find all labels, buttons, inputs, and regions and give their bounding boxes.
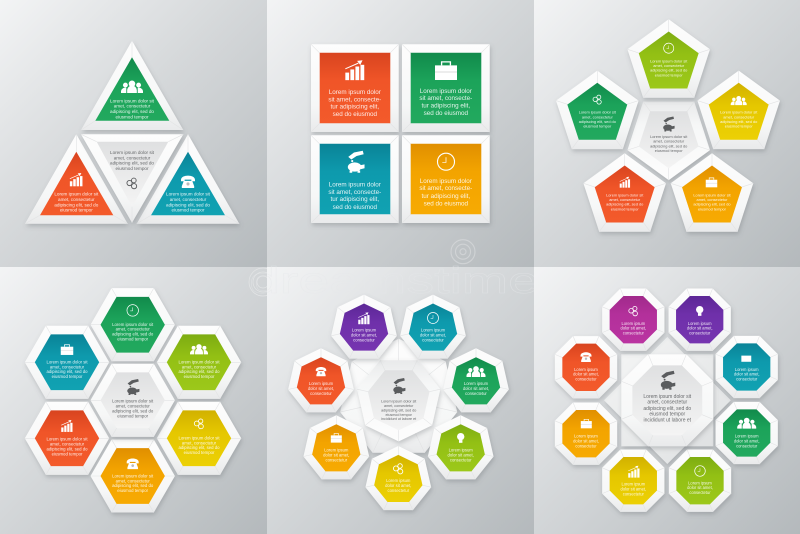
hexagon: red: adipiscing elit, sed do xyxy=(46,446,88,452)
pentagon: lime: amet, consectetur xyxy=(653,63,685,68)
hexagon: lime xyxy=(157,326,241,399)
panel: hexagon diagram xyxy=(0,267,277,534)
panel: octagon diagram xyxy=(534,267,800,534)
octagon: magenta: dolor sit amet, xyxy=(620,326,646,331)
octagon: lime: consectetur xyxy=(689,490,711,495)
octagon: teal xyxy=(716,336,778,398)
octagon: green: Lorem ipsum xyxy=(735,434,759,439)
hexagon: red: eiusmod tempor xyxy=(52,451,83,456)
watermark spiral xyxy=(249,268,277,296)
center triangle: neutral: adipiscing elit, sed do xyxy=(110,161,154,166)
octagon: center neutral: incididunt ut labore et xyxy=(644,417,692,423)
heptagon: center neutral: Lorem ipsum dolor sit xyxy=(381,400,416,404)
octagon: yellow: consectetur xyxy=(623,491,645,496)
octagon: center neutral: Lorem ipsum dolor sit xyxy=(643,394,692,400)
heptagon: lime: dolor sit amet, xyxy=(448,453,474,458)
heptagon: center neutral xyxy=(357,360,440,441)
octagon: center neutral: eiusmod tempor xyxy=(649,412,686,418)
octagon: teal: Lorem ipsum xyxy=(735,367,759,372)
hexagon: yellow: amet, consectetur xyxy=(182,440,217,445)
heptagon: green: consectetur xyxy=(465,391,487,396)
octagon: teal: dolor sit amet, xyxy=(734,372,760,377)
hexagon: lime: eiusmod tempor xyxy=(184,374,215,379)
octagon: green xyxy=(716,402,778,464)
hexagon: teal: eiusmod tempor xyxy=(52,374,83,379)
hexagon: green: adipiscing elit, sed do xyxy=(112,332,154,337)
center triangle: neutral: eiusmod tempor xyxy=(116,166,149,171)
hexagon: orange xyxy=(90,439,175,513)
hexagon: yellow: eiusmod tempor xyxy=(184,450,215,455)
octagon: orange: Lorem ipsum xyxy=(574,434,598,439)
octagon: lime xyxy=(669,450,731,512)
heptagon: lime: Lorem ipsum xyxy=(449,448,473,453)
pentagon: orange: adipiscing elit, sed do xyxy=(693,202,731,207)
pentagon: green: adipiscing elit, sed do xyxy=(579,119,616,124)
hexagon: center neutral: amet, consectetur xyxy=(116,403,150,408)
watermark spiral xyxy=(451,240,475,264)
octagon: yellow: dolor sit amet, xyxy=(620,487,646,492)
heptagon: purple: Lorem ipsum xyxy=(352,328,377,333)
square: orange xyxy=(402,135,490,223)
panel: pentagon diagram xyxy=(534,0,800,267)
pentagon: lime xyxy=(627,19,710,98)
octagon: orange: consectetur xyxy=(575,443,597,448)
square: teal: sed do eiusmod xyxy=(333,204,378,211)
heptagon: green: dolor sit amet, xyxy=(463,386,489,391)
hexagon: teal xyxy=(25,326,109,399)
pentagon: lime: Lorem ipsum dolor sit xyxy=(650,58,688,63)
hexagon: teal: amet, consectetur xyxy=(50,364,85,369)
watermark: dreamstime xyxy=(249,260,539,301)
right triangle: teal: amet, consectetur xyxy=(170,197,207,202)
pentagon: yellow: amet, consectetur xyxy=(723,114,755,119)
octagon: green: dolor sit amet, xyxy=(734,439,760,444)
pentagon: green: amet, consectetur xyxy=(582,114,613,119)
heptagon: orange: consectetur xyxy=(325,458,348,463)
octagon: yellow xyxy=(602,450,664,512)
pentagon: center neutral: eiusmod tempor xyxy=(655,148,683,153)
hexagon: green: eiusmod tempor xyxy=(117,336,149,342)
hexagon: yellow xyxy=(157,402,241,475)
octagon: center neutral: amet, consectetur xyxy=(647,400,688,406)
square: orange: sit amet, consecte- xyxy=(419,185,472,192)
pentagon: red: amet, consectetur xyxy=(609,197,641,202)
pentagon: red: Lorem ipsum dolor sit xyxy=(606,192,644,197)
octagon: magenta: consectetur xyxy=(623,330,645,335)
left triangle: red xyxy=(25,134,128,224)
octagon: purple: dolor sit amet, xyxy=(687,326,713,331)
panel: triangle diagram xyxy=(0,0,267,267)
pentagon: orange: eiusmod tempor xyxy=(698,206,727,211)
hexagon: lime: Lorem ipsum dolor sit xyxy=(178,359,220,364)
square: red xyxy=(311,44,399,132)
heptagon: teal: consectetur xyxy=(422,338,444,343)
heptagon: purple: dolor sit amet, xyxy=(351,333,377,338)
pentagon: orange xyxy=(671,153,753,232)
heptagon: yellow: consectetur xyxy=(387,488,410,493)
hexagon: center neutral: eiusmod tempor xyxy=(117,413,149,418)
hexagon: yellow: adipiscing elit, sed do xyxy=(178,445,220,450)
octagon: orange xyxy=(555,403,617,465)
hexagon: green xyxy=(90,288,175,361)
pentagon: red: adipiscing elit, sed do xyxy=(606,202,643,207)
octagon: magenta: Lorem ipsum xyxy=(621,321,646,326)
pentagon: lime: adipiscing elit, sed do xyxy=(650,68,687,73)
heptagon: orange xyxy=(303,415,369,479)
heptagon: green: Lorem ipsum xyxy=(464,381,489,386)
pentagon: green: Lorem ipsum dolor sit xyxy=(579,110,617,115)
heptagon: center neutral: adipiscing elit, sed do xyxy=(381,408,416,412)
heptagon: center neutral: eiusmod tempor xyxy=(385,413,413,417)
hexagon: red: amet, consectetur xyxy=(50,442,85,447)
pentagon: yellow: adipiscing elit, sed do xyxy=(720,119,757,124)
square: teal: tur adipiscing elit, xyxy=(330,196,379,203)
right triangle: teal: eiusmod tempor xyxy=(172,208,205,213)
hexagon: center neutral: Lorem ipsum dolor sit xyxy=(112,398,154,403)
right triangle: teal: adipiscing elit, sed do xyxy=(166,202,210,207)
hexagon: green: Lorem ipsum dolor sit xyxy=(112,322,154,327)
octagon: purple xyxy=(669,289,731,351)
square: orange: tur adipiscing elit, xyxy=(421,193,470,200)
octagon: red xyxy=(555,336,617,398)
octagon: purple: Lorem ipsum xyxy=(688,321,712,326)
square: red: sed do eiusmod xyxy=(333,111,378,118)
pentagon: red xyxy=(583,153,666,232)
square: green xyxy=(402,44,490,132)
square: teal xyxy=(311,135,399,223)
octagon: red: dolor sit amet, xyxy=(573,372,599,377)
square: green: tur adipiscing elit, xyxy=(421,102,470,110)
octagon: orange: dolor sit amet, xyxy=(573,439,599,444)
heptagon: teal xyxy=(400,295,466,359)
square: red: Lorem ipsum dolor xyxy=(329,89,381,96)
pentagon: yellow: eiusmod tempor xyxy=(725,124,753,129)
center triangle: neutral xyxy=(81,134,183,223)
heptagon: teal: dolor sit amet, xyxy=(420,333,446,338)
center triangle: neutral: amet, consectetur xyxy=(114,155,151,160)
heptagon: red: Lorem ipsum xyxy=(309,381,334,386)
heptagon: purple: consectetur xyxy=(353,338,375,343)
pentagon: center neutral: amet, consectetur xyxy=(653,139,685,144)
square: orange: sed do eiusmod xyxy=(424,200,469,208)
star backing xyxy=(340,339,457,453)
right triangle: teal xyxy=(137,134,239,224)
heptagon: red: consectetur xyxy=(310,391,332,396)
panel: heptagon diagram xyxy=(249,260,539,534)
hexagon: red xyxy=(25,402,109,475)
heptagon: lime xyxy=(428,415,494,479)
pentagon: center neutral xyxy=(627,102,710,180)
left triangle: red: Lorem ipsum dolor sit xyxy=(54,192,99,197)
heptagon: purple xyxy=(331,295,397,359)
hexagon: teal: adipiscing elit, sed do xyxy=(46,369,88,374)
square: red: sit amet, consecte- xyxy=(328,96,381,103)
hexagon: center neutral: adipiscing elit, sed do xyxy=(112,408,154,413)
left triangle: red: eiusmod tempor xyxy=(60,208,93,213)
square: green: Lorem ipsum dolor xyxy=(420,88,472,95)
octagon: red: Lorem ipsum xyxy=(574,367,598,372)
right triangle: teal: Lorem ipsum dolor sit xyxy=(166,192,211,197)
square: teal: Lorem ipsum dolor xyxy=(329,182,381,188)
center triangle: neutral: Lorem ipsum dolor sit xyxy=(110,150,155,155)
left triangle: red: amet, consectetur xyxy=(58,197,95,202)
heptagon: red xyxy=(288,348,354,412)
hexagon: lime: amet, consectetur xyxy=(182,364,217,369)
pentagon: yellow: Lorem ipsum dolor sit xyxy=(720,110,758,115)
hexagon: orange: adipiscing elit, sed do xyxy=(112,483,154,488)
hexagon: yellow: Lorem ipsum dolor sit xyxy=(178,435,220,440)
heptagon: green xyxy=(443,348,509,412)
heptagon: yellow xyxy=(365,446,431,510)
octagon: green: consectetur xyxy=(736,443,758,448)
pentagon: green: eiusmod tempor xyxy=(583,124,612,129)
pentagon: orange: amet, consectetur xyxy=(697,197,728,202)
pentagon: yellow xyxy=(697,71,780,149)
left triangle: red: adipiscing elit, sed do xyxy=(54,202,99,207)
pentagon: lime: eiusmod tempor xyxy=(655,72,683,77)
hexagon: green: amet, consectetur xyxy=(116,327,150,332)
octagon: yellow: Lorem ipsum xyxy=(621,482,646,487)
square and diamond backing xyxy=(604,337,731,464)
top triangle: green: Lorem ipsum dolor sit xyxy=(110,98,155,103)
octagon: teal: consectetur xyxy=(736,376,758,382)
pentagon: red: eiusmod tempor xyxy=(611,206,639,211)
panel: square diagram xyxy=(267,0,534,267)
pentagon: orange: Lorem ipsum dolor sit xyxy=(693,192,732,197)
heptagon: center neutral: incididunt ut labore et xyxy=(381,417,416,421)
octagon: lime: Lorem ipsum xyxy=(688,480,712,485)
heptagon: orange: Lorem ipsum xyxy=(324,448,349,453)
pentagon: green xyxy=(556,71,639,149)
square: orange: Lorem ipsum dolor xyxy=(420,178,472,185)
hexagon: teal: Lorem ipsum dolor sit xyxy=(46,359,88,364)
hexagon: orange: eiusmod tempor xyxy=(117,488,149,493)
top triangle: green: adipiscing elit, sed do xyxy=(110,109,154,114)
heptagon: center neutral: amet, consectetur xyxy=(384,404,414,408)
heptagon: teal: Lorem ipsum xyxy=(421,328,446,333)
square: teal: sit amet, consecte- xyxy=(328,189,381,196)
top triangle: green: eiusmod tempor xyxy=(116,114,149,119)
pentagon: center neutral: adipiscing elit, sed do xyxy=(650,143,687,148)
octagon: lime: dolor sit amet, xyxy=(687,485,713,490)
square: red: tur adipiscing elit, xyxy=(330,104,379,111)
top triangle: green xyxy=(81,41,183,130)
heptagon: red: dolor sit amet, xyxy=(308,386,334,391)
top triangle: green: amet, consectetur xyxy=(114,104,151,109)
octagon: center neutral: adipiscing elit, sed do xyxy=(643,406,691,412)
hexagon: center neutral xyxy=(90,364,175,437)
hexagon: lime: adipiscing elit, sed do xyxy=(178,369,220,374)
heptagon: lime: consectetur xyxy=(450,458,472,463)
octagon: magenta xyxy=(602,289,664,351)
octagon: purple: consectetur xyxy=(689,330,711,335)
heptagon: yellow: dolor sit amet, xyxy=(385,483,411,488)
heptagon: orange: dolor sit amet, xyxy=(323,453,349,458)
hexagon: red: Lorem ipsum dolor sit xyxy=(46,437,88,442)
square: green: sed do eiusmod xyxy=(424,110,469,117)
heptagon: yellow: Lorem ipsum xyxy=(386,478,411,483)
hexagon: orange: Lorem ipsum dolor sit xyxy=(112,473,154,478)
hexagon: orange: amet, consectetur xyxy=(116,478,150,483)
square: green: sit amet, consecte- xyxy=(419,95,472,102)
octagon: center neutral xyxy=(621,354,713,446)
octagon: red: consectetur xyxy=(575,376,597,382)
pentagon: center neutral: Lorem ipsum dolor sit xyxy=(650,134,688,139)
